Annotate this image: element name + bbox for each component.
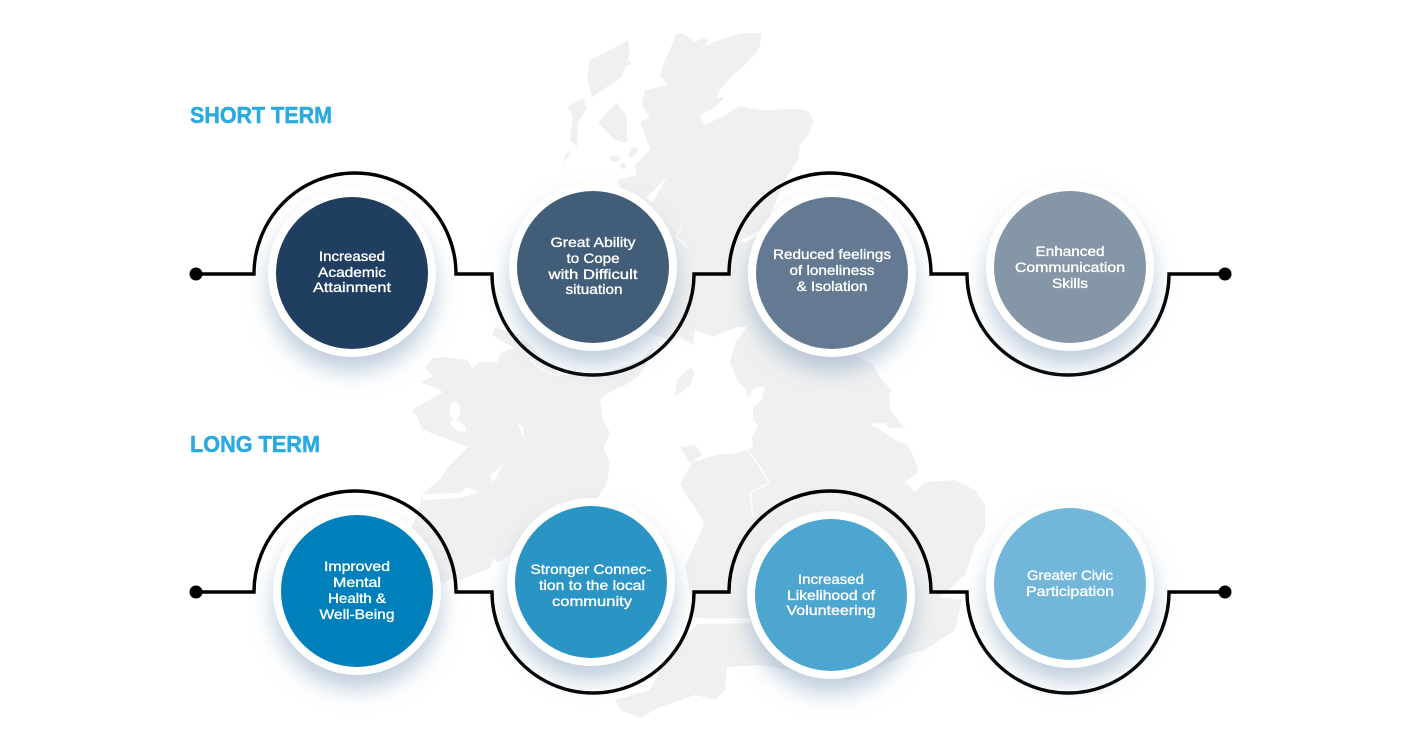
step: Reduced feelings of loneliness: & Isolation: [796, 278, 868, 294]
step: Increased Academic Attainment: Increased: [319, 248, 385, 264]
step: Great Ability to Cope: Great Ability: [550, 234, 636, 250]
map detail: river lines: [519, 228, 769, 517]
map detail: rivers, lakes and inlets: [423, 100, 888, 624]
step: Increased Likelihood of Volunteering: Increased: [798, 571, 864, 587]
step: Greater Civic Participation: [986, 500, 1154, 668]
step: Reduced feelings of loneliness: Reduced feelings: [773, 246, 891, 262]
step: Great Ability to Cope: with Difficult: [547, 266, 638, 282]
step: Great Ability to Cope: situation: [566, 281, 622, 297]
step: Enhanced Communication Skills: Enhanced: [1036, 243, 1104, 259]
heading: short term: SHORT TERM: [190, 102, 332, 128]
step: Reduced feelings of loneliness: [748, 189, 916, 357]
step: Increased Likelihood of Volunteering: [747, 511, 915, 679]
step: Improved Mental Health: Mental: [333, 574, 381, 590]
step: Increased Likelihood of Volunteering: Volunteering: [786, 602, 876, 618]
step: Enhanced Communication Skills: Skills: [1052, 275, 1088, 291]
step: Greater Civic Participation: Participation: [1026, 583, 1114, 599]
step: Great Ability to Cope: to Cope: [566, 250, 620, 266]
step: Increased Academic Attainment: Academic: [318, 264, 386, 280]
step: Greater Civic Participation: Greater Civic: [1027, 567, 1113, 583]
step: Increased Likelihood of Volunteering: Likelihood of: [787, 587, 875, 603]
timeline: short term: [190, 173, 1232, 375]
step: Enhanced Communication Skills: [986, 183, 1154, 351]
heading: long term: LONG TERM: [190, 431, 320, 457]
step: Stronger Connection: community: [552, 593, 632, 609]
step: Stronger Connection: [507, 498, 675, 666]
step: Stronger Connection: Stronger Connec-: [530, 561, 652, 577]
step: Reduced feelings of loneliness: of loneliness: [790, 262, 874, 278]
step: Improved Mental Health: Well-Being: [320, 606, 394, 622]
background map of the UK and Ireland: [400, 33, 985, 718]
step: Increased Academic Attainment: [268, 189, 436, 357]
timeline: long term: [190, 491, 1232, 693]
step: Improved Mental Health: [273, 507, 441, 675]
step: Great Ability to Cope: [509, 183, 677, 351]
step: Stronger Connection: tion to the local: [539, 577, 645, 593]
step: Improved Mental Health: Health &: [328, 590, 387, 606]
step: Improved Mental Health: Improved: [324, 558, 390, 574]
step: Increased Academic Attainment: Attainment: [313, 279, 391, 295]
step: Enhanced Communication Skills: Communication: [1015, 259, 1125, 275]
